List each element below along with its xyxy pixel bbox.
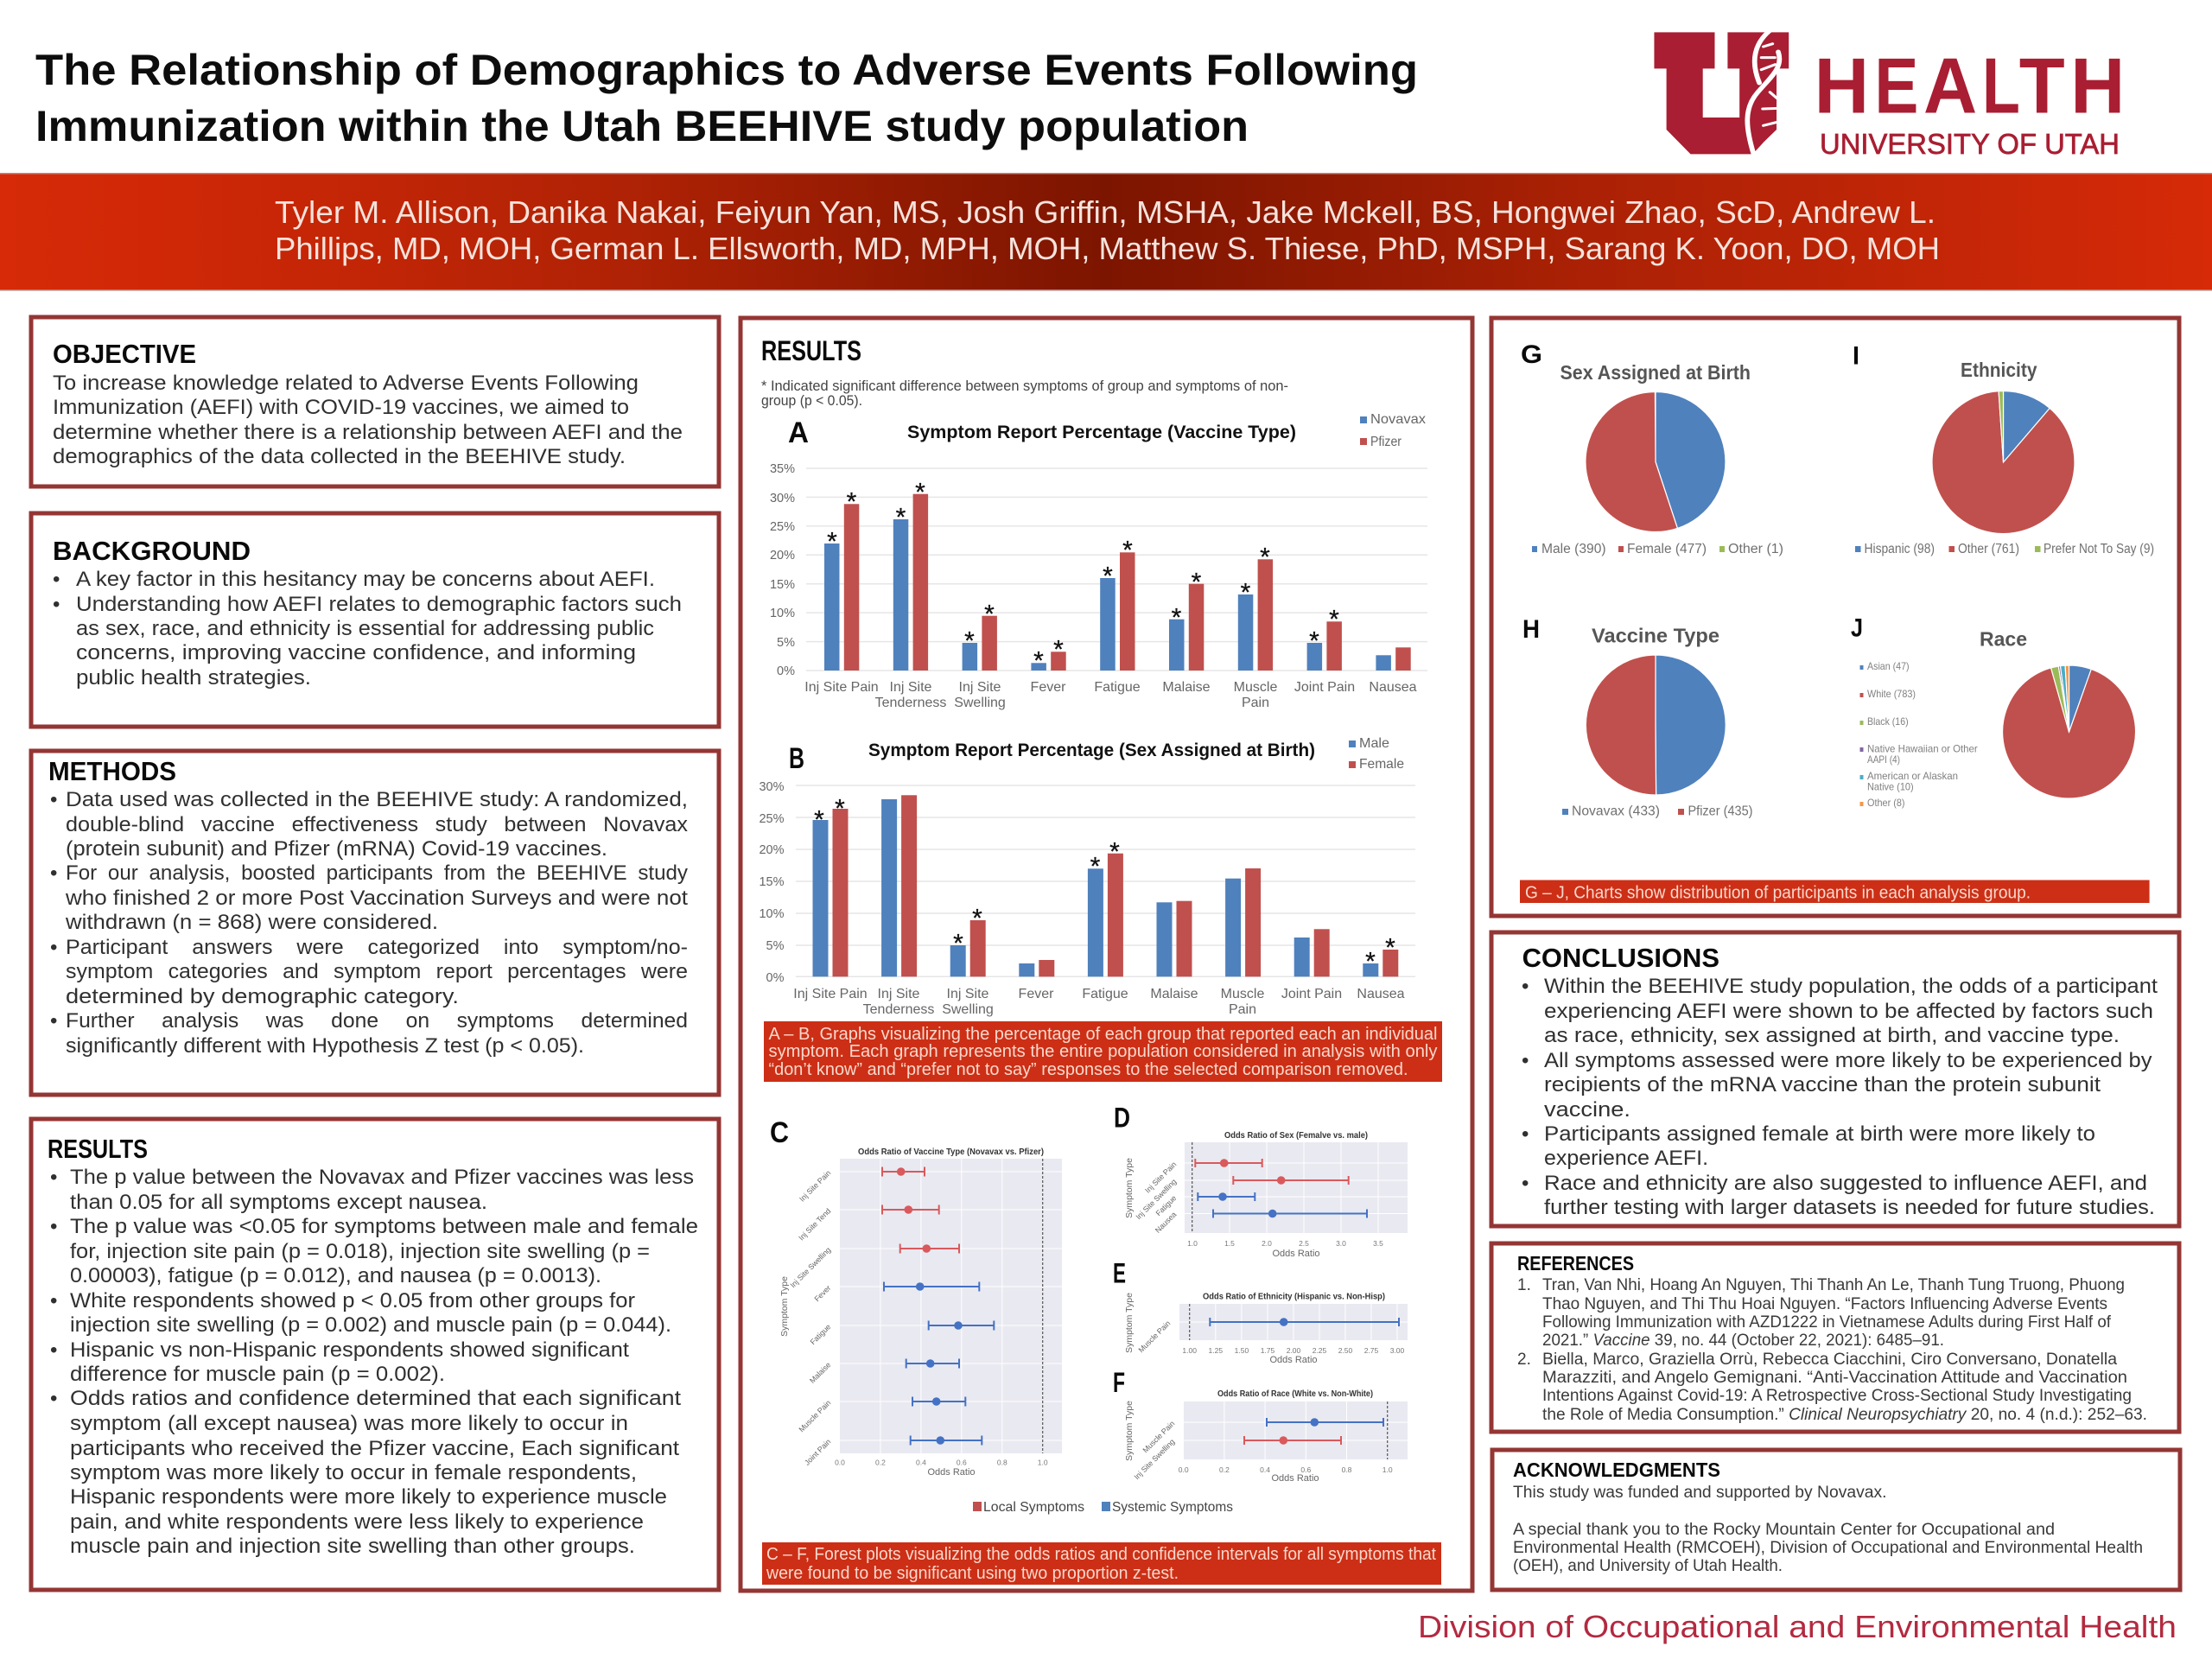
bar chart B: * [814, 805, 824, 835]
pie chart G: sex assigned at birth: Female (477) [1627, 542, 1707, 556]
bar chart B: * [1385, 933, 1395, 963]
bar chart B: Male [1359, 736, 1389, 751]
title: Immunization within the Utah BEEHIVE study population [35, 102, 1249, 150]
text: methods bullets: double-blind vaccine effectiveness study between Novavax [66, 813, 688, 836]
bar chart A: 10% [770, 607, 795, 620]
HEALTH wordmark: T [2019, 43, 2065, 130]
icon: U with DNA helix [1654, 31, 1789, 158]
text: results bullets: participants who received the Pfizer vaccine, Each significant [70, 1437, 679, 1460]
bar chart B: 5% [766, 939, 785, 953]
forest plot E: 3.00 [1390, 1346, 1405, 1355]
caption: A-B: symptom. Each graph represents the entire population considered in analysis with only [769, 1042, 1438, 1061]
pie chart J: race: Race [1980, 627, 2027, 650]
text: results bullets: symptom (all except nausea) was more likely to occur in [70, 1412, 628, 1435]
bar chart A: Pain [1242, 696, 1269, 710]
bar chart A: 25% [770, 520, 795, 534]
bar chart A: Muscle [1234, 680, 1277, 695]
text: reference list: Tran, Van Nhi, Hoang An Nguyen, Thi Thanh An Le, Thanh Tung Truong, Phuong [1542, 1276, 2125, 1294]
text: reference list: Biella, Marco, Graziella Orrù, Rebecca Ciacchini, Ciro Conversano, Donatella [1542, 1351, 2117, 1369]
text: methods bullets: (protein subunit) and Pfizer (mRNA) Covid-19 vaccines. [66, 837, 607, 861]
text: results bullets: • [50, 1289, 57, 1313]
bar chart B: Malaise [1150, 987, 1198, 1001]
forest plot C: Fever [812, 1283, 832, 1303]
text: acknowledgments body: (OEH), and University of Utah Health. [1513, 1557, 1783, 1575]
text: objective body: Immunization (AEFI) with COVID-19 vaccines, we aimed to [53, 396, 629, 419]
HEALTH wordmark: A [1923, 43, 1977, 130]
forest plot F: Muscle Pain [1141, 1419, 1176, 1454]
text: conclusions bullets [1522, 975, 2158, 1219]
forest plot E: Odds Ratio of Ethnicity (Hispanic vs. Non-Hisp) [1203, 1293, 1385, 1301]
forest plot E: 2.50 [1338, 1346, 1353, 1355]
text: acknowledgments body [1513, 1484, 2143, 1575]
pie chart G: sex assigned at birth: Other (1) [1728, 542, 1783, 556]
caption: C-F: C – F, Forest plots visualizing the odds ratios and confidence intervals for all symptoms that [766, 1545, 1436, 1564]
forest plot C: 0.4 [916, 1459, 926, 1467]
bar chart A: * [1122, 536, 1133, 565]
bar chart A: 20% [770, 549, 795, 563]
bar chart A: 35% [770, 462, 795, 476]
text: conclusions bullets: Participants assigned female at birth were more likely to [1544, 1122, 2095, 1146]
pie chart G: sex assigned at birth: Male (390) [1541, 542, 1606, 556]
forest plot D: D [1114, 1103, 1130, 1134]
text: results bullets [50, 1166, 698, 1558]
bar chart B: Fatigue [1082, 987, 1128, 1001]
bar chart A: * [1329, 605, 1339, 634]
authors band [0, 173, 2212, 290]
forest plot C: Symptom Type [779, 1276, 790, 1337]
bar chart B: * [972, 904, 982, 933]
forest plot D: 1.0 [1187, 1239, 1198, 1248]
text: conclusions bullets: • [1522, 1049, 1529, 1072]
bar chart B: * [1109, 838, 1120, 866]
bar chart B: Inj Site [947, 987, 989, 1001]
forest plot C: Muscle Pain [797, 1398, 832, 1433]
bar chart B: Pain [1229, 1002, 1256, 1017]
forest plot D: Symptom Type [1124, 1158, 1135, 1218]
bar chart A: 30% [770, 492, 795, 505]
forest plot D: Inj Site Pain [1143, 1160, 1178, 1195]
forest plot E: Muscle Pain [1136, 1319, 1172, 1354]
bar chart A: * [984, 600, 995, 629]
bar chart A: * [1260, 543, 1270, 572]
text: methods bullets: • [50, 936, 57, 959]
text: results bullets: The p value between the Novavax and Pfizer vaccines was less [70, 1166, 694, 1189]
panel: references [1491, 1243, 2179, 1432]
panel: background [31, 513, 719, 727]
forest plot D: 3.5 [1373, 1239, 1383, 1248]
forest plot E: Symptom Type [1124, 1293, 1135, 1353]
text: conclusions bullets: experiencing AEFI were shown to be affected by factors such [1544, 1000, 2153, 1023]
bar chart A: * [915, 479, 925, 506]
bar chart B: Nausea [1357, 987, 1405, 1001]
pie chart J: race: J [1851, 613, 1863, 643]
text: acknowledgments body: A special thank you to the Rocky Mountain Center for Occupational and [1513, 1521, 2055, 1539]
heading: acknowledgments: ACKNOWLEDGMENTS [1513, 1459, 1720, 1481]
forest plot F: 0.4 [1260, 1465, 1270, 1474]
bar chart A: Inj Site Pain [804, 680, 879, 695]
bar chart B: 15% [759, 875, 785, 889]
bar chart A: * [1053, 636, 1064, 664]
bar chart B: * [1090, 852, 1101, 881]
caption: A-B: “don’t know” and “prefer not to say” responses to the selected comparison removed. [769, 1060, 1408, 1079]
bar chart A: * [827, 527, 837, 556]
bar chart B: Symptom Report Percentage (Sex Assigned at Birth) [868, 741, 1315, 760]
text: methods bullets: • [50, 1009, 57, 1033]
text: conclusions bullets: Race and ethnicity are also suggested to influence AEFI, and [1544, 1172, 2147, 1195]
bar chart A: Novavax [1370, 412, 1426, 427]
panel: results text [31, 1119, 719, 1590]
forest plot C: 0.6 [957, 1459, 967, 1467]
forest plot E: Odds Ratio [1269, 1355, 1318, 1365]
legend: forest plots [973, 1500, 1233, 1515]
text: conclusions bullets: as race, ethnicity, sex assigned at birth, and vaccine type. [1544, 1024, 2120, 1047]
bar chart A: Fatigue [1094, 680, 1141, 695]
pie chart I: ethnicity: Prefer Not To Say (9) [2044, 542, 2154, 556]
forest plot C: Inj Site Pain [798, 1168, 832, 1204]
heading: methods: METHODS [48, 756, 176, 786]
note: significance: group (p < 0.05). [761, 392, 862, 409]
heading: results: RESULTS [761, 335, 861, 366]
text: background bullets: • [53, 568, 60, 591]
bar chart A: Inj Site [890, 680, 932, 695]
panel: methods [31, 751, 719, 1095]
text: methods bullets: who finished 2 or more Post Vaccination Surveys and were not [65, 887, 688, 910]
bar chart B: 0% [766, 971, 785, 985]
text: reference list: Intentions Against Covid-19: A Retrospective Cross-Sectional Study Investigating [1542, 1387, 2132, 1405]
forest plot D: 3.0 [1336, 1239, 1346, 1248]
pie chart H: vaccine type: Novavax (433) [1572, 804, 1660, 819]
bar chart A: * [896, 503, 906, 532]
note: significance [761, 378, 1288, 409]
forest plot F: Odds Ratio [1271, 1473, 1319, 1484]
bar chart B: * [953, 930, 963, 957]
forest plot E: 1.50 [1235, 1346, 1249, 1355]
text: objective body: demographics of the data collected in the BEEHIVE study. [53, 445, 626, 468]
forest plot D: 2.5 [1299, 1239, 1309, 1248]
text: results bullets: Hispanic respondents were more likely to experience muscle [70, 1485, 667, 1509]
pie chart J: race: Asian (47) [1867, 660, 1910, 672]
text: methods bullets: Participant answers were categorized into symptom/no- [66, 936, 688, 959]
forest plot E: 1.25 [1209, 1346, 1223, 1355]
forest plot F: 0.8 [1342, 1465, 1352, 1474]
bar chart A: * [1192, 569, 1202, 596]
text: reference list: the Role of Media Consumption.” Clinical Neuropsychiatry 20, no. 4 (n.d.): 252–63. [1542, 1406, 2147, 1424]
bar chart B: * [835, 795, 845, 823]
authors [275, 194, 1940, 266]
text: methods bullets: Further analysis was done on symptoms determined [66, 1009, 688, 1033]
caption: A-B: A – B, Graphs visualizing the percentage of each group that reported each an individual [769, 1025, 1438, 1044]
text: acknowledgments body: Environmental Health (RMCOEH), Division of Occupational and Environmental Health [1513, 1539, 2143, 1557]
text: results bullets: than 0.05 for all symptoms except nausea. [70, 1191, 487, 1214]
pie chart H: vaccine type: H [1522, 615, 1540, 644]
forest plot C: Inj Site Tend [797, 1206, 832, 1243]
text: results bullets: pain, and white respondents were less likely to experience [70, 1510, 644, 1534]
text: conclusions bullets: Within the BEEHIVE study population, the odds of a participant [1544, 975, 2158, 998]
caption: G-J [1520, 880, 2150, 903]
text: methods bullets: significantly different with Hypothesis Z test (p < 0.05). [66, 1034, 584, 1058]
text: methods bullets [50, 788, 688, 1058]
pie chart J: race: White (783) [1867, 688, 1916, 700]
forest plot F: Inj Site Swelling [1132, 1437, 1176, 1481]
forest plot F: 0.2 [1219, 1465, 1230, 1474]
forest plot E: 1.00 [1182, 1346, 1197, 1355]
HEALTH wordmark: E [1874, 43, 1918, 130]
forest plot C: C [770, 1116, 789, 1149]
bar chart A: 5% [777, 636, 795, 650]
forest plot D: Nausea [1154, 1210, 1178, 1235]
panel: conclusions [1491, 932, 2179, 1226]
pie chart G: sex assigned at birth [1521, 340, 1783, 556]
pie chart J: race: AAPI (4) [1867, 753, 1900, 766]
text: results bullets: • [50, 1387, 57, 1410]
text: reference list: Marazziti, and Angelo Gemignani. “Anti-Vaccination Attitude and Vaccination [1542, 1369, 2127, 1387]
text: objective body: determine whether there is a relationship between AEFI and the [53, 421, 683, 444]
forest plot C: Fatigue [809, 1322, 832, 1346]
forest plot E: 2.75 [1364, 1346, 1379, 1355]
text: objective body [53, 372, 683, 468]
bar chart A: * [1033, 646, 1044, 676]
panel: acknowledgments [1492, 1450, 2180, 1590]
text: conclusions bullets: further testing with larger datasets is needed for future studies. [1544, 1196, 2155, 1219]
forest plot E: 1.75 [1261, 1346, 1275, 1355]
forest plot C: 0.0 [835, 1459, 845, 1467]
text: results bullets: Hispanic vs non-Hispanic respondents showed significant [70, 1338, 629, 1362]
bar chart A: * [1103, 562, 1113, 591]
caption: A-B [764, 1021, 1442, 1082]
text: reference list: 2021.” Vaccine 39, no. 44 (October 22, 2021): 6485–91. [1542, 1332, 1944, 1350]
text: methods bullets: • [50, 861, 57, 885]
heading: background: BACKGROUND [53, 536, 251, 566]
pie chart I: ethnicity [1853, 342, 2154, 556]
pie chart J: race: Other (8) [1867, 797, 1904, 809]
panel: pie charts [1491, 318, 2179, 916]
bar chart B: Inj Site [878, 987, 920, 1001]
text: methods bullets: withdrawn (n = 868) were considered. [65, 911, 438, 934]
forest plot C: 0.8 [997, 1459, 1007, 1467]
pie chart G: sex assigned at birth: Sex Assigned at Birth [1560, 361, 1751, 384]
bar chart A: A [788, 416, 809, 449]
panel: objective [31, 317, 719, 486]
legend: forest plots: Local Symptoms [983, 1500, 1084, 1515]
HEALTH wordmark: L [1982, 43, 2020, 130]
forest plot C: Joint Pain [803, 1437, 832, 1467]
pie chart J: race: Native Hawaiian or Other [1867, 743, 1978, 755]
forest plot E [1113, 1258, 1408, 1365]
forest plot C: Odds Ratio [927, 1467, 976, 1478]
forest plot C: Malaise [808, 1360, 832, 1385]
forest plot F: Odds Ratio of Race (White vs. Non-White) [1217, 1389, 1373, 1399]
bar chart A: Malaise [1162, 680, 1211, 695]
forest plot F: 0.6 [1300, 1465, 1311, 1474]
pie chart I: ethnicity: I [1853, 342, 1859, 370]
text: results bullets: • [50, 1166, 57, 1189]
text: background bullets [53, 568, 682, 690]
text: background bullets: Understanding how AEFI relates to demographic factors such [76, 593, 682, 616]
bar chart B: 10% [759, 907, 785, 921]
text: conclusions bullets: • [1522, 1122, 1529, 1146]
text: results bullets: • [50, 1338, 57, 1362]
bar chart B: Muscle [1221, 987, 1264, 1001]
caption: C-F [762, 1542, 1441, 1585]
forest plot F: Symptom Type [1124, 1401, 1135, 1461]
bar chart A: * [1172, 603, 1182, 632]
text: results bullets: The p value was <0.05 for symptoms between male and female [70, 1215, 698, 1238]
forest plot C: 1.0 [1038, 1459, 1048, 1467]
text: results bullets: White respondents showed p < 0.05 from other groups for [70, 1289, 635, 1313]
text: background bullets: public health strategies. [76, 666, 311, 690]
text: reference list: 2. [1517, 1351, 1531, 1369]
title [35, 46, 1418, 150]
bar chart A: 0% [777, 664, 795, 678]
text: reference list: Thao Nguyen, and Thi Thu Hoai Nguyen. “Factors Influencing Adverse Events [1542, 1295, 2107, 1313]
title: The Relationship of Demographics to Adverse Events Following [35, 46, 1418, 94]
heading: results: RESULTS [48, 1134, 148, 1164]
bar chart A: Symptom Report Percentage (Vaccine Type) [907, 423, 1296, 442]
bar chart B: Inj Site Pain [793, 987, 868, 1001]
text: conclusions bullets: experience AEFI. [1544, 1147, 1708, 1170]
pie chart G: sex assigned at birth: G [1521, 340, 1542, 369]
authors: Phillips, MD, MOH, German L. Ellsworth, MD, MPH, MOH, Matthew S. Thiese, PhD, MSPH, Sarang K. Yoon, DO, MOH [275, 231, 1940, 266]
pie chart J: race: Black (16) [1867, 715, 1909, 728]
text: background bullets: A key factor in this hesitancy may be concerns about AEFI. [76, 568, 655, 591]
forest plot F: 0.0 [1179, 1465, 1189, 1474]
forest plot E: E [1113, 1258, 1126, 1289]
bar chart B: Swelling [942, 1002, 994, 1017]
forest plot F [1113, 1367, 1408, 1484]
authors: Tyler M. Allison, Danika Nakai, Feiyun Yan, MS, Josh Griffin, MSHA, Jake Mckell, BS, Hongwei Zhao, ScD, Andrew L. [275, 194, 1936, 230]
bar chart A: Joint Pain [1294, 680, 1355, 695]
text: background bullets: concerns, improving vaccine confidence, and informing [76, 641, 636, 664]
heading: objective: OBJECTIVE [53, 339, 196, 369]
forest plot C: Odds Ratio of Vaccine Type (Novavax vs. Pfizer) [858, 1147, 1044, 1157]
text: results bullets: for, injection site pain (p = 0.018), injection site swelling (p = [70, 1240, 650, 1263]
text: results bullets: difference for muscle pain (p = 0.002). [70, 1363, 445, 1386]
text: methods bullets: determined by demographic category. [66, 985, 459, 1008]
bar chart B: 20% [759, 843, 785, 857]
text: methods bullets: symptom categories and symptom report percentages were [66, 960, 688, 983]
bar chart A: * [964, 627, 975, 655]
forest plot C: 0.2 [875, 1459, 886, 1467]
forest plot C: Inj Site Swelling [788, 1245, 832, 1289]
forest plot D: Odds Ratio of Sex (Femalve vs. male) [1224, 1131, 1368, 1141]
bar chart B: Female [1359, 757, 1404, 772]
text: reference list [1517, 1276, 2147, 1424]
bar chart A: Tenderness [875, 696, 946, 710]
pie chart H: vaccine type: Vaccine Type [1592, 625, 1719, 647]
text: results bullets: • [50, 1215, 57, 1238]
text: conclusions bullets: • [1522, 1172, 1529, 1195]
forest plot D: Odds Ratio [1272, 1249, 1320, 1259]
bar chart A: Nausea [1369, 680, 1417, 695]
bar chart A: * [847, 487, 857, 517]
text: methods bullets: Data used was collected in the BEEHIVE study: A randomized, [66, 788, 688, 811]
text: reference list: Following Immunization with AZD1222 in Vietnamese Adults during First Half of [1542, 1313, 2112, 1332]
bar chart B: 25% [759, 812, 785, 826]
bar chart B: Fever [1019, 987, 1054, 1001]
text: conclusions bullets: • [1522, 975, 1529, 998]
panel: results charts [741, 318, 1472, 1591]
text: results bullets: injection site swelling (p = 0.002) and muscle pain (p = 0.044). [70, 1313, 671, 1337]
bar chart B: * [1365, 947, 1376, 976]
bar chart B: Tenderness [863, 1002, 934, 1017]
text: results bullets: Odds ratios and confidence determined that each significant [70, 1387, 681, 1410]
University of Utah wordmark: UNIVERSITY OF UTAH [1820, 128, 2120, 160]
bar chart A: Swelling [954, 696, 1006, 710]
text: objective body: To increase knowledge related to Adverse Events Following [53, 372, 639, 395]
bar chart A: * [1309, 627, 1319, 655]
bar chart A: Pfizer [1370, 435, 1402, 449]
pie chart H: vaccine type [1522, 615, 1752, 819]
heading: conclusions: CONCLUSIONS [1522, 943, 1719, 973]
footer: division name: Division of Occupational and Environmental Health [1418, 1609, 2177, 1644]
pie chart H: vaccine type: Pfizer (435) [1688, 804, 1752, 819]
caption: G-J: G – J, Charts show distribution of participants in each analysis group. [1525, 884, 2031, 903]
forest plot D [1114, 1103, 1408, 1259]
text: results bullets: 0.00003), fatigue (p = 0.012), and nausea (p = 0.0013). [70, 1264, 601, 1287]
forest plot D: Inj Site Swelling [1134, 1177, 1178, 1221]
bar chart A: * [1241, 579, 1251, 607]
pie chart I: ethnicity: Ethnicity [1961, 359, 2037, 381]
forest plot C [770, 1116, 1062, 1478]
bar chart A [770, 412, 1427, 710]
pie chart I: ethnicity: Hispanic (98) [1865, 542, 1935, 556]
forest plot D: 2.0 [1262, 1239, 1272, 1248]
HEALTH wordmark: H [2070, 43, 2125, 130]
text: methods bullets: For our analysis, boosted participants from the BEEHIVE study [66, 861, 688, 885]
heading: references: REFERENCES [1517, 1252, 1634, 1274]
bar chart B: B [789, 742, 804, 775]
bar chart A: 15% [770, 578, 795, 592]
forest plot E: 2.00 [1287, 1346, 1301, 1355]
bar chart A: Fever [1031, 680, 1066, 695]
text: conclusions bullets: vaccine. [1544, 1098, 1630, 1122]
text: conclusions bullets: recipients of the mRNA vaccine than the protein subunit [1544, 1073, 2101, 1096]
pie chart J: race [1851, 613, 2136, 809]
pie chart J: race: Native (10) [1867, 781, 1914, 793]
text: methods bullets: • [50, 788, 57, 811]
text: results bullets: symptom was more likely to occur in female respondents, [70, 1461, 637, 1484]
forest plot F: F [1113, 1367, 1125, 1398]
text: reference list: 1. [1517, 1276, 1531, 1294]
bar chart A: Inj Site [959, 680, 1001, 695]
pie chart I: ethnicity: Other (761) [1958, 542, 2019, 556]
bar chart B [759, 736, 1415, 1017]
forest plot D: 1.5 [1224, 1239, 1235, 1248]
bar chart B: Joint Pain [1281, 987, 1342, 1001]
text: results bullets: muscle pain and injection site swelling than other groups. [70, 1535, 635, 1558]
forest plot E: 2.25 [1313, 1346, 1327, 1355]
caption: C-F: were found to be significant using two proportion z-test. [766, 1564, 1179, 1583]
logo: University of Utah Health [1654, 31, 2125, 160]
forest plot D: Fatigue [1154, 1193, 1178, 1217]
legend: forest plots: Systemic Symptoms [1112, 1500, 1233, 1515]
text: background bullets: • [53, 593, 60, 616]
note: significance: * Indicated significant difference between symptoms of group and symptoms of non- [761, 378, 1288, 394]
HEALTH wordmark: H [1815, 43, 1869, 130]
pie chart J: race: American or Alaskan [1867, 770, 1958, 782]
text: conclusions bullets: All symptoms assessed were more likely to be experienced by [1544, 1049, 2152, 1072]
forest plot F: 1.0 [1382, 1465, 1393, 1474]
text: background bullets: as sex, race, and ethnicity is essential for addressing public [76, 617, 654, 640]
HEALTH wordmark [1815, 43, 2125, 130]
text: acknowledgments body: This study was funded and supported by Novavax. [1513, 1484, 1887, 1502]
bar chart B: 30% [759, 780, 785, 794]
